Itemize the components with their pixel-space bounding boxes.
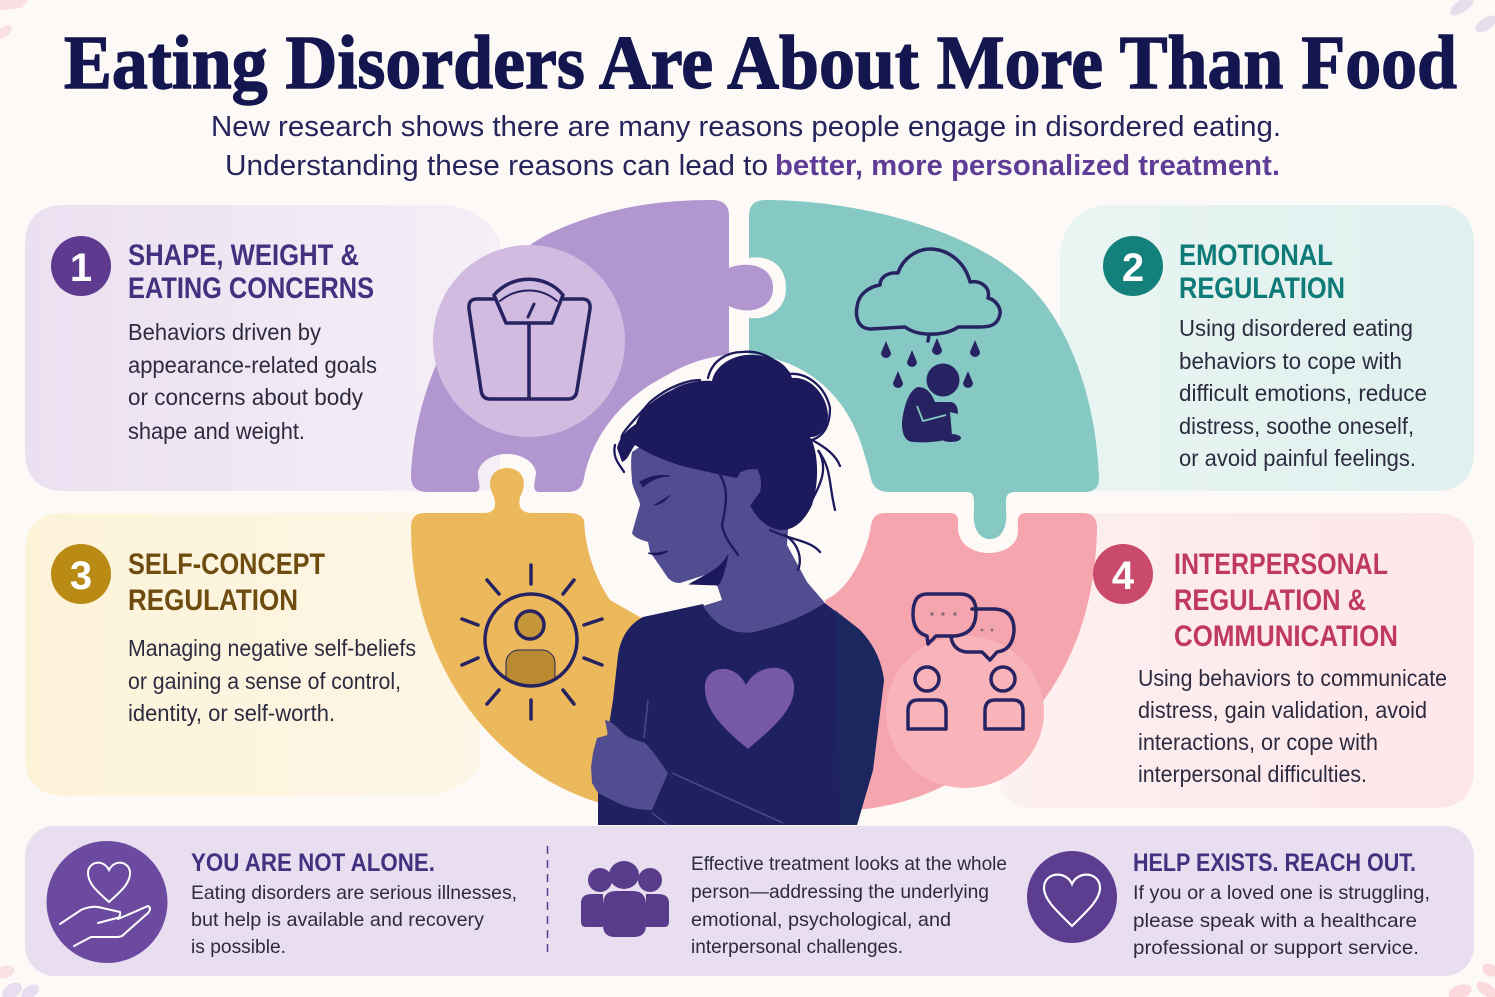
puzzle piece: yellow (411, 468, 645, 803)
text: effective treatment: person—addressing the underlying (691, 881, 989, 903)
subtitle (211, 111, 1281, 182)
body text 2: or avoid painful feelings. (1179, 445, 1416, 471)
illustration: woman in profile (591, 352, 884, 825)
heading 4: COMMUNICATION (1174, 620, 1398, 653)
text: you are not alone (191, 849, 517, 958)
body text 3: Managing negative self-beliefs (128, 635, 416, 661)
body text 2 (1179, 315, 1427, 471)
badge 1 (51, 236, 111, 296)
text: help exists: please speak with a healthcare (1133, 910, 1417, 932)
body text 4 (1138, 665, 1447, 787)
text: effective treatment: interpersonal challenges. (691, 936, 903, 958)
heading 1 (128, 239, 374, 305)
body text 2: Using disordered eating (1179, 315, 1413, 341)
icon: two people talking (908, 594, 1023, 729)
body text 4: Using behaviors to communicate (1138, 665, 1447, 691)
heading 3 (128, 548, 325, 617)
badge 3 (51, 544, 111, 604)
white halo behind head (584, 354, 870, 620)
body text 1: or concerns about body (128, 384, 363, 410)
text: you are not alone: YOU ARE NOT ALONE. (191, 849, 435, 877)
text: help exists: HELP EXISTS. REACH OUT. (1133, 849, 1416, 877)
puzzle: central ring (411, 200, 1099, 810)
puzzle piece: pink (825, 513, 1097, 810)
subtitle: New research shows there are many reasons people engage in disordered eating. (211, 111, 1281, 143)
subtitle: better, more personalized treatment. (775, 150, 1280, 182)
text: you are not alone: is possible. (191, 936, 286, 958)
icon: rain cloud and crouching child (856, 249, 1000, 442)
text: effective treatment: emotional, psychological, and (691, 909, 951, 931)
body text 4: interpersonal difficulties. (1138, 761, 1367, 787)
puzzle piece: teal (749, 200, 1099, 539)
title: Eating Disorders Are About More Than Food (64, 21, 1457, 105)
heading 1: SHAPE, WEIGHT & (128, 239, 359, 272)
badge 2 (1103, 236, 1163, 296)
panel: card 1 background (25, 205, 500, 491)
hand (591, 720, 668, 810)
icon circle: people backdrop (886, 636, 1044, 788)
text: effective treatment: Effective treatment looks at the whole (691, 853, 1007, 875)
puzzle piece: purple (411, 200, 773, 492)
subtitle: Understanding these reasons can lead to (225, 150, 768, 182)
body text 1: shape and weight. (128, 418, 305, 444)
heading 4: REGULATION & (1174, 584, 1366, 617)
shirt details (644, 700, 783, 825)
panel: card 2 background (1060, 205, 1474, 491)
icon: group of people (581, 861, 669, 937)
badge 3: 3 (70, 554, 92, 598)
heading 2 (1179, 239, 1345, 305)
panel: card 3 background (25, 513, 480, 796)
heading 1: EATING CONCERNS (128, 272, 374, 305)
icon: weighing scale (469, 279, 590, 399)
badge 2: 2 (1122, 246, 1144, 290)
icon: person in sun (462, 565, 602, 719)
badge 1: 1 (70, 246, 92, 290)
heading 2: REGULATION (1179, 272, 1345, 305)
panel: bottom banner (25, 826, 1474, 976)
heading 4 (1174, 548, 1398, 653)
body text 4: distress, gain validation, avoid (1138, 697, 1427, 723)
badge 4: 4 (1112, 554, 1135, 598)
heart on shirt (705, 668, 794, 749)
heading 3: SELF-CONCEPT (128, 548, 325, 581)
body text 4: interactions, or cope with (1138, 729, 1378, 755)
body text 3: identity, or self-worth. (128, 700, 335, 726)
shirt (598, 598, 884, 825)
badge 4 (1093, 544, 1153, 604)
body text 1 (128, 319, 377, 444)
body text 3: or gaining a sense of control, (128, 668, 401, 694)
body text 2: difficult emotions, reduce (1179, 380, 1427, 406)
icon circle: scale backdrop (433, 245, 625, 437)
body text 3 (128, 635, 416, 726)
text: effective treatment (691, 853, 1007, 958)
panel: card 4 background (1000, 513, 1474, 808)
body text 2: distress, soothe oneself, (1179, 413, 1414, 439)
text: help exists: professional or support service. (1133, 937, 1419, 959)
ear (733, 469, 761, 510)
icon: heart in open hand (46, 841, 168, 963)
text: you are not alone: but help is available and recovery (191, 909, 484, 931)
facial features (640, 475, 728, 585)
body text 1: appearance-related goals (128, 352, 377, 378)
hair (617, 355, 828, 530)
heading 3: REGULATION (128, 584, 298, 617)
icon: heart in circle (1027, 851, 1117, 943)
heading 2: EMOTIONAL (1179, 239, 1333, 272)
neck and face (631, 420, 825, 632)
body text 1: Behaviors driven by (128, 319, 321, 345)
text: help exists (1133, 849, 1430, 959)
heading 4: INTERPERSONAL (1174, 548, 1388, 581)
text: help exists: If you or a loved one is struggling, (1133, 882, 1430, 904)
text: you are not alone: Eating disorders are serious illnesses, (191, 882, 517, 904)
body text 2: behaviors to cope with (1179, 348, 1402, 374)
hair strands (614, 352, 840, 570)
